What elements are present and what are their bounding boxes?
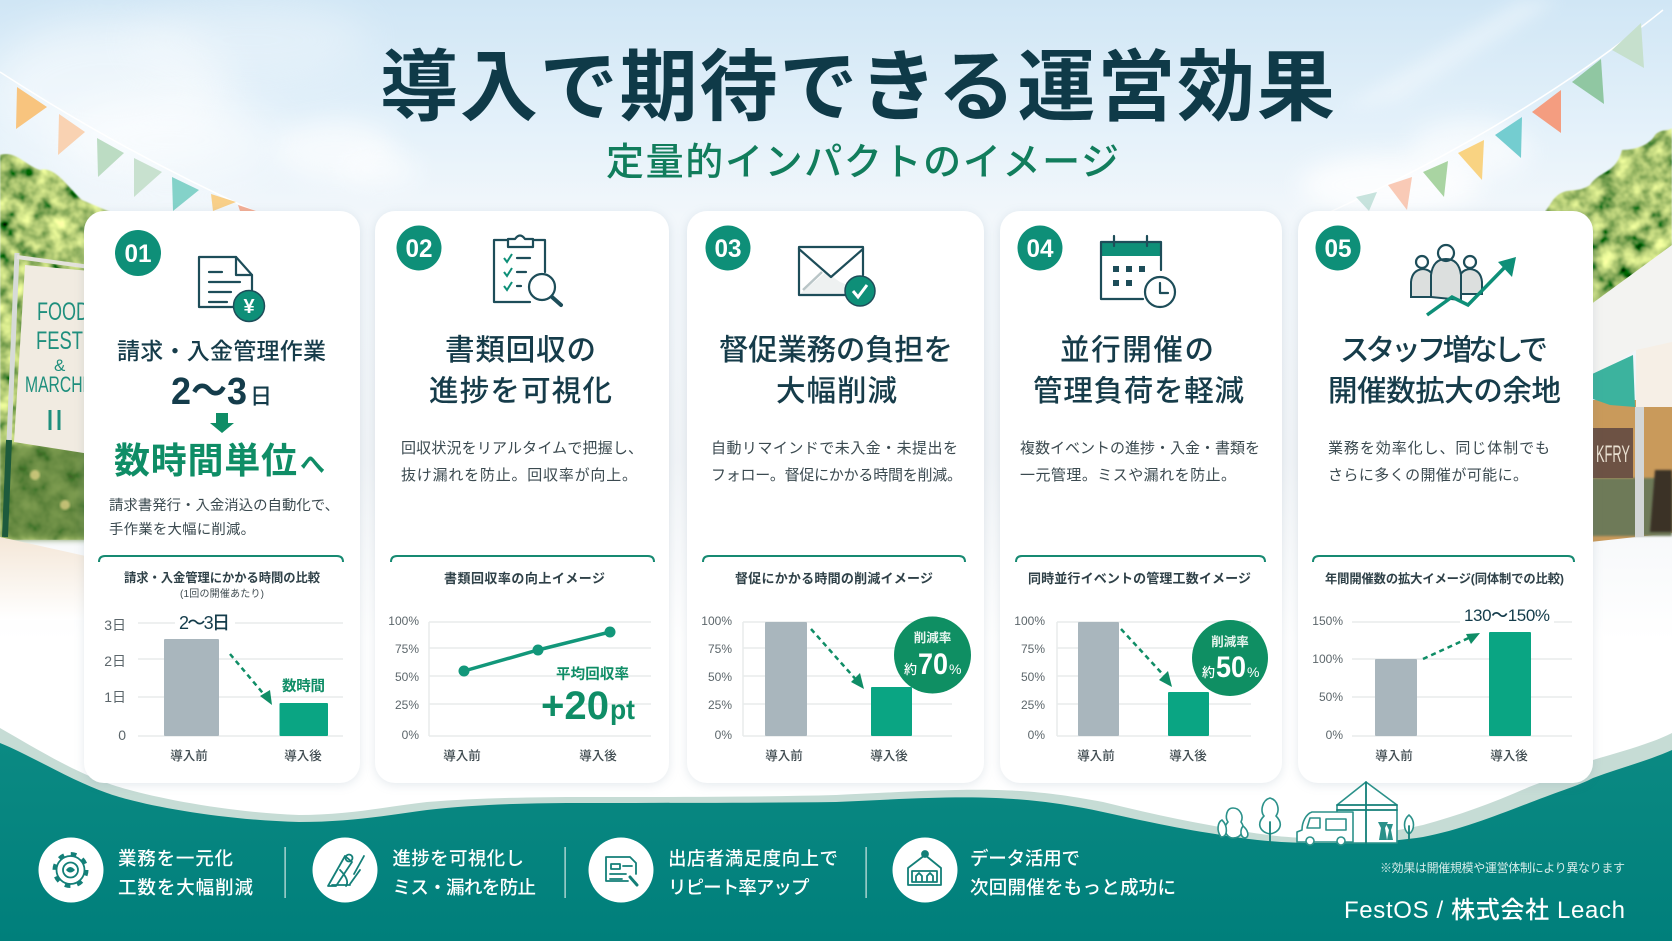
line chart: collection rate: 75% (395, 642, 419, 656)
callout: 70 percent reduction: 約 (904, 662, 917, 677)
line chart: collection rate: 50% (395, 670, 419, 684)
footer band: teal wave (0, 743, 1672, 941)
callout: 70 percent reduction: 70 (918, 648, 948, 681)
callout: 70 percent reduction: % (949, 661, 961, 677)
card title: 進捗を可視化 (429, 375, 612, 408)
card title: 開催数拡大の余地 (1328, 375, 1561, 408)
footer benefit 1: 工数を大幅削減 (118, 877, 253, 898)
tent with bakery stall, right: KFRY (1596, 441, 1630, 468)
bar chart: annual events: 150% (1312, 614, 1343, 628)
chart title: 請求・入金管理にかかる時間の比較 (124, 570, 321, 585)
badge 03 (706, 226, 750, 270)
footer benefit 3: 出店者満足度向上で (668, 848, 838, 869)
footer credit: FestOS / 株式会社 Leach (1344, 897, 1625, 924)
badge 05: 05 (1324, 235, 1352, 263)
description (1020, 440, 1260, 484)
footer benefit 2: ミス・漏れを防止 (392, 877, 536, 898)
description: 一元管理。ミスや漏れを防止。 (1020, 466, 1236, 484)
footer benefit 3: リピート率アップ (668, 877, 810, 898)
description (109, 497, 339, 538)
card title: 書類回収の (445, 334, 596, 367)
icon: calendar with clock (1101, 236, 1175, 307)
footer benefit 4: 次回開催をもっと成功に (970, 877, 1176, 898)
bar chart: time comparison: 0 (118, 727, 126, 743)
bar chart: time comparison: 2日 (104, 653, 126, 669)
callout: 50 percent reduction (1192, 620, 1268, 696)
label: work item: 請求・入金管理作業 (117, 338, 326, 364)
bar chart: annual events: 導入前 (1375, 748, 1413, 763)
bar chart: parallel workload: 25% (1021, 698, 1045, 712)
line chart: collection rate (388, 614, 651, 763)
footer benefit 3 (588, 838, 838, 902)
footer benefit 1 (38, 838, 253, 902)
icon: gear (55, 854, 86, 886)
card title: 管理負荷を軽減 (1033, 375, 1244, 408)
bar chart: reminder time: 25% (708, 698, 732, 712)
banner: food fest and marche: FEST (36, 327, 83, 355)
footer benefit 2 (312, 838, 536, 902)
bar chart: time comparison (104, 612, 343, 763)
chart title: 同時並行イベントの管理工数イメージ (1028, 571, 1251, 586)
badge 04: 04 (1026, 235, 1054, 263)
badge 04 (1018, 226, 1062, 270)
banner: food fest and marche: FOOD (37, 298, 89, 326)
chart title (124, 570, 321, 600)
title: 導入で期待できる運営効果 (380, 43, 1335, 131)
bar chart: reminder time: 導入後 (870, 748, 908, 763)
panel: card 02 document collection (375, 211, 669, 783)
background: tree, right (1545, 128, 1672, 303)
icon: invoice with yen (199, 257, 264, 322)
panel: card 03 reminders (687, 211, 984, 783)
bar chart: time comparison: 導入後 (284, 748, 322, 763)
badge 02: 02 (406, 235, 432, 263)
arrow: down (210, 413, 234, 433)
bar chart: parallel workload: 0% (1028, 728, 1045, 742)
line chart: collection rate: 導入後 (579, 748, 617, 763)
bar chart: reminder time: 100% (701, 614, 732, 628)
bar chart: reminder time: 75% (708, 642, 732, 656)
card title: スタッフ増なしで (1340, 334, 1548, 367)
description (401, 440, 643, 484)
chart title: 年間開催数の拡大イメージ(同体制での比較) (1325, 571, 1564, 586)
panel: card 05 growth (1298, 211, 1593, 783)
bar chart: annual events: 100% (1312, 652, 1343, 666)
description: フォロー。督促にかかる時間を削減。 (711, 467, 962, 484)
chart title: 書類回収率の向上イメージ (444, 571, 605, 586)
card title (1328, 334, 1561, 408)
banner: food fest and marche: MARCHE (25, 372, 93, 397)
callout: 70 percent reduction: 削減率 (914, 630, 951, 645)
bar chart: parallel workload (1014, 614, 1268, 763)
card title (719, 334, 953, 408)
footer band: pale wave (0, 728, 1672, 860)
background: beige ground left (0, 537, 90, 620)
description: さらに多くの開催が可能に。 (1328, 466, 1528, 484)
bar chart: parallel workload: 導入後 (1169, 748, 1207, 763)
bunting: left garland (0, 72, 256, 212)
description (1328, 440, 1550, 484)
badge 05 (1316, 226, 1360, 270)
callout: 70 percent reduction (894, 616, 971, 694)
description: 自動リマインドで未入金・未提出を (711, 440, 958, 457)
bar chart: annual events: 0% (1326, 728, 1343, 742)
description: 請求書発行・入金消込の自動化で、 (109, 497, 339, 514)
bunting: right garland (1330, 10, 1663, 212)
card title (1033, 334, 1244, 408)
footer benefit 4: データ活用で (970, 848, 1080, 869)
banner: food fest and marche (5, 253, 93, 537)
tent with bakery stall, right (1590, 245, 1672, 542)
bar chart: reminder time: 0% (715, 728, 732, 742)
line chart: collection rate: 25% (395, 698, 419, 712)
description (711, 440, 962, 484)
line chart: collection rate: 導入前 (443, 748, 481, 763)
icon: hanging sign board (908, 851, 941, 885)
illustration: festival scene with trees, food truck and tent (1218, 782, 1414, 845)
description: 複数イベントの進捗・入金・書類を (1020, 440, 1260, 457)
line chart: collection rate: pt (610, 694, 635, 725)
description: 手作業を大幅に削減。 (109, 521, 255, 538)
bar chart: reminder time: 導入前 (765, 748, 803, 763)
background: trees, left (0, 154, 110, 540)
bar chart: reminder time (701, 614, 971, 763)
badge 02 (396, 226, 442, 270)
badge 03: 03 (714, 235, 742, 263)
icon: envelope with check (799, 247, 875, 306)
after value: へ (300, 451, 325, 479)
panel: card 04 parallel events (1000, 211, 1282, 783)
icon: team with growth arrow (1411, 245, 1516, 315)
badge 01: 01 (124, 240, 152, 268)
icon: survey document (606, 857, 637, 885)
card title: 督促業務の負担を (719, 334, 953, 367)
bar chart: annual events: 導入後 (1490, 748, 1528, 763)
bar chart: annual events: 50% (1319, 690, 1343, 704)
footnote: ※効果は開催規模や運営体制により異なります (1380, 860, 1625, 875)
bar chart: time comparison: 2〜3日 (179, 613, 230, 633)
bar chart: reminder time: 50% (708, 670, 732, 684)
description: 業務を効率化し、同じ体制でも (1328, 440, 1550, 457)
background: sky with clouds (0, 0, 1672, 640)
before value: 2〜3 (171, 371, 247, 413)
footer benefit 4 (892, 838, 1176, 902)
bar chart: parallel workload: 導入前 (1077, 748, 1115, 763)
bar chart: annual events (1312, 606, 1572, 763)
chart title: 督促にかかる時間の削減イメージ (735, 571, 933, 586)
callout: 50 percent reduction: % (1247, 664, 1259, 680)
bar chart: time comparison: 3日 (104, 617, 126, 633)
bar chart: time comparison: 1日 (104, 689, 126, 705)
bar chart: parallel workload: 100% (1014, 614, 1045, 628)
bar chart: time comparison: 導入前 (170, 748, 208, 763)
footer benefit 1: 業務を一元化 (118, 848, 233, 869)
icon: invoice with yen: ¥ (243, 296, 255, 318)
description: 抜け漏れを防止。回収率が向上。 (401, 467, 637, 484)
chart title: (1回の開催あたり) (180, 588, 264, 600)
line chart: collection rate: 0% (402, 728, 419, 742)
callout: 50 percent reduction: 削減率 (1211, 634, 1249, 649)
panel: card 01 billing (84, 211, 360, 783)
line chart: collection rate: 平均回収率 (556, 665, 629, 683)
line chart: collection rate: +20 (541, 684, 609, 728)
after value: 数時間単位 (114, 440, 297, 481)
subtitle: 定量的インパクトのイメージ (606, 142, 1119, 184)
bar chart: time comparison: 数時間 (282, 677, 325, 695)
callout: 50 percent reduction: 50 (1216, 651, 1246, 684)
icon: person with pencil (328, 854, 364, 886)
card title: 並行開催の (1060, 334, 1214, 367)
badge 01 (115, 230, 161, 276)
description: 回収状況をリアルタイムで把握し、 (401, 440, 643, 457)
bar chart: parallel workload: 75% (1021, 642, 1045, 656)
card title: 大幅削減 (776, 375, 897, 408)
banner: food fest and marche: & (54, 356, 66, 375)
card title (429, 334, 612, 408)
bar chart: parallel workload: 50% (1021, 670, 1045, 684)
footer benefit 2: 進捗を可視化し (392, 848, 524, 869)
before value: 日 (250, 384, 272, 409)
bar chart: annual events: 130〜150% (1464, 606, 1550, 625)
callout: 50 percent reduction: 約 (1202, 665, 1215, 680)
icon: clipboard with magnifier (494, 236, 561, 305)
line chart: collection rate: 100% (388, 614, 419, 628)
